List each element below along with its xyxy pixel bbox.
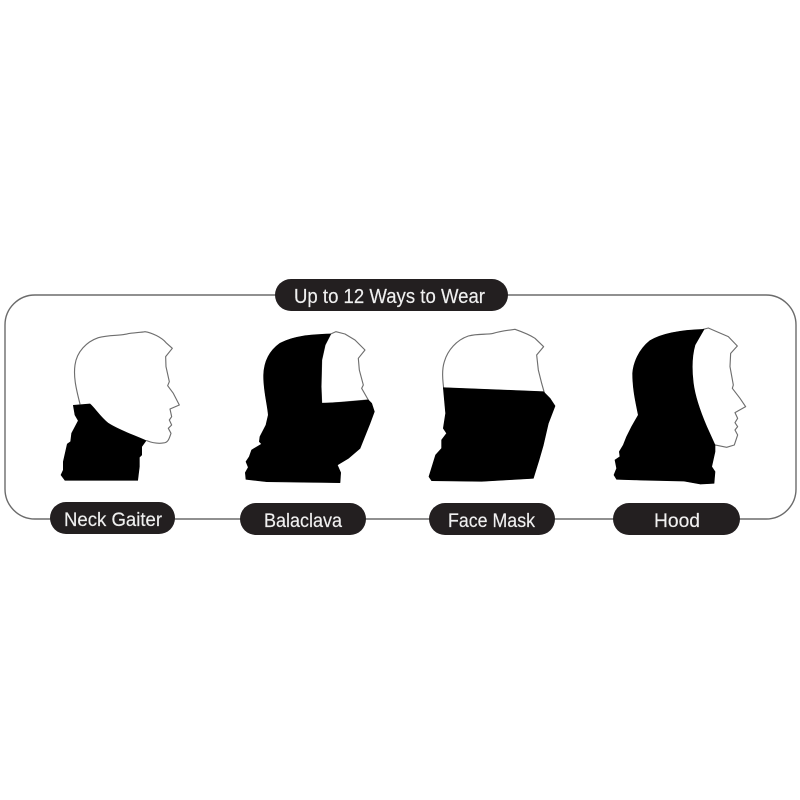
icon: balaclava bbox=[245, 332, 374, 483]
label: balaclava: Balaclava bbox=[264, 511, 342, 532]
label: neck gaiter: Neck Gaiter bbox=[64, 510, 163, 531]
label: neck gaiter bbox=[50, 502, 175, 534]
rounded frame bbox=[5, 295, 796, 519]
label: hood bbox=[613, 503, 740, 535]
label: balaclava bbox=[240, 503, 366, 535]
title pill bbox=[275, 279, 508, 311]
label: face mask bbox=[429, 503, 555, 535]
icon: face mask bbox=[429, 329, 555, 481]
label: face mask: Face Mask bbox=[448, 511, 535, 532]
label: hood: Hood bbox=[654, 511, 700, 532]
icon: neck gaiter bbox=[61, 332, 179, 480]
icon: hood bbox=[614, 328, 746, 484]
title pill: Up to 12 Ways to Wear bbox=[294, 286, 485, 308]
